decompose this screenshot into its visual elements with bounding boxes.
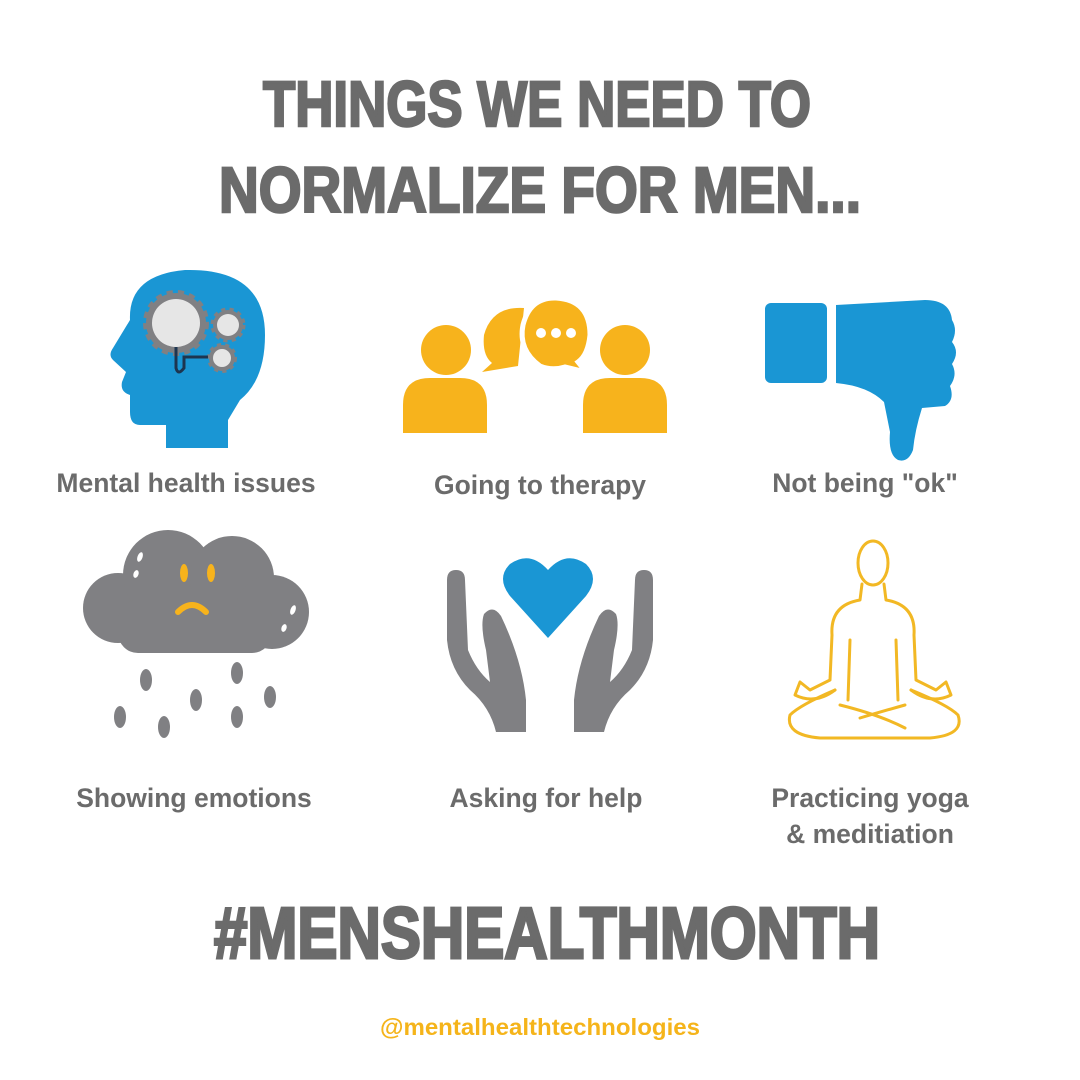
hashtag: #MENSHEALTHMONTH — [214, 894, 880, 974]
label: going to therapy: Going to therapy — [434, 470, 646, 500]
icon: hands with heart — [447, 558, 653, 732]
label: practicing yoga & meditation — [771, 783, 969, 849]
label: practicing yoga & meditation: & meditiation — [786, 819, 954, 849]
icon: sad rain cloud — [83, 530, 309, 738]
title: THINGS WE NEED TO — [263, 68, 811, 140]
icon: head with gears — [110, 270, 265, 448]
icon: therapy people and bubbles — [403, 298, 667, 433]
title: NORMALIZE FOR MEN... — [219, 154, 861, 226]
icon: thumbs down — [765, 300, 956, 461]
label: showing emotions: Showing emotions — [76, 783, 312, 813]
label: not being ok: Not being "ok" — [772, 468, 958, 498]
icon: yoga figure — [789, 541, 959, 738]
label: practicing yoga & meditation: Practicing yoga — [771, 783, 969, 813]
title — [219, 68, 861, 226]
label: mental health issues: Mental health issues — [56, 468, 316, 498]
handle: @mentalhealthtechnologies — [380, 1014, 700, 1040]
label: asking for help: Asking for help — [450, 783, 642, 813]
